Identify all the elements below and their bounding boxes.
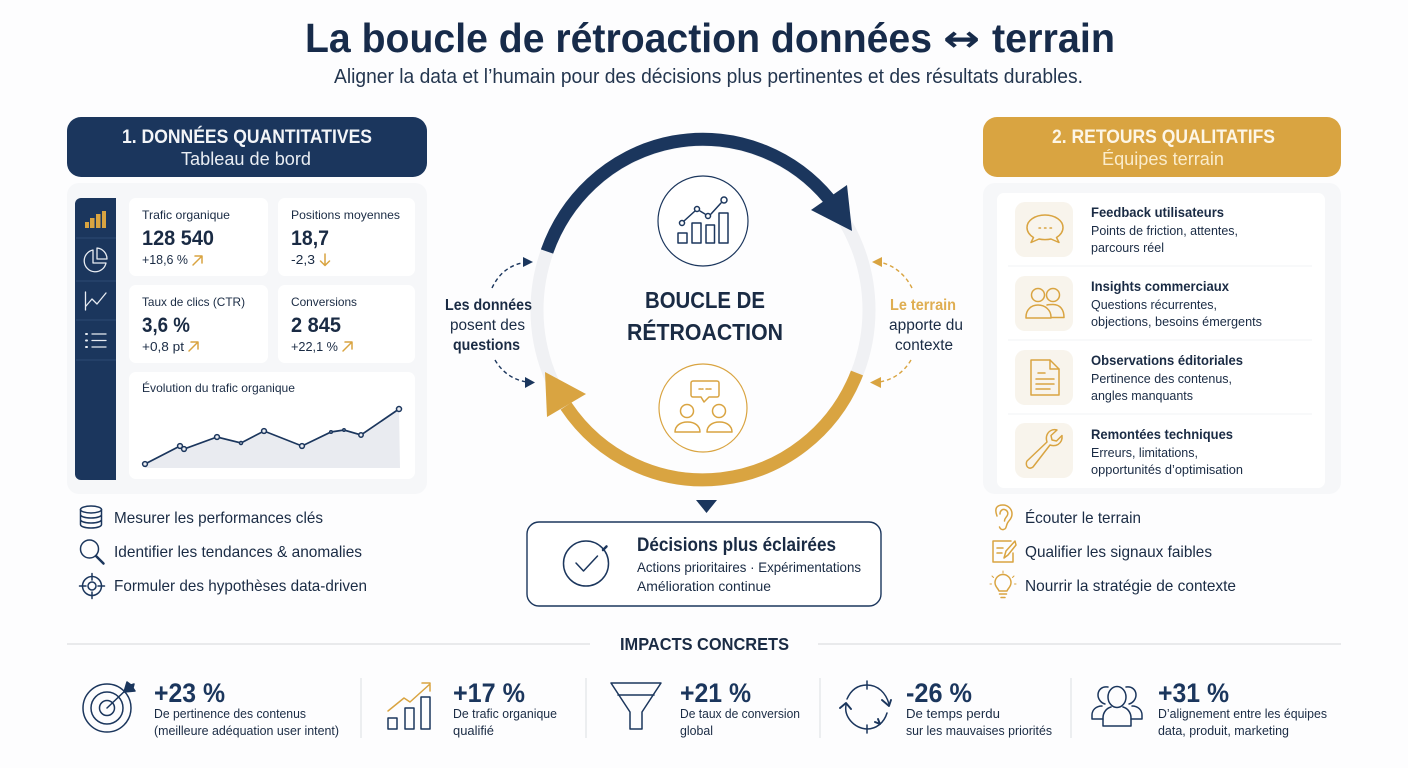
KPI card: conversions: Conversions [291,295,357,309]
text: mesurer: Mesurer les performances clés [114,510,323,527]
side label: le terrain apporte du contexte: apporte du [889,317,963,334]
list: objectifs données [80,506,367,598]
side label: les données posent des questions: questions [453,337,520,354]
side label: le terrain apporte du contexte: contexte [895,337,953,354]
title: La boucle de rétroaction données [305,15,932,61]
item: feedback utilisateurs: parcours réel [1091,241,1164,255]
icon: team [1092,686,1142,726]
navy arrow: données vers terrain [547,139,852,252]
item: remontées techniques: opportunités d’optimisation [1091,463,1243,477]
text: nourrir: Nourrir la stratégie de contexte [1025,578,1236,595]
icon: check circle [564,541,608,586]
side label: les données posent des questions [445,257,535,388]
panel heading: données quantitatives: 1. DONNÉES QUANTITATIVES [122,126,372,148]
icon: magnifier [80,540,104,564]
KPI card: positions moyennes: -2,3 [291,252,315,267]
KPI card: trafic organique: +18,6 % [142,252,188,267]
metric: trafic: +17 % [453,678,525,708]
metric: trafic [388,678,557,738]
metric: trafic: qualifié [453,724,494,738]
item: insights commerciaux: Questions récurrentes, [1091,298,1217,312]
panel: données quantitatives [67,117,427,494]
text: formuler: Formuler des hypothèses data-driven [114,578,367,595]
icon: rising bars [388,683,430,729]
KPI card: taux de clics [129,285,268,363]
side label: le terrain apporte du contexte [870,257,963,388]
callout text [637,535,861,594]
metric: conversion [611,678,800,738]
KPI card: trafic organique [129,198,268,276]
metric: temps perdu [840,678,1052,738]
gold arrow: terrain vers données [545,372,857,480]
text: écouter: Écouter le terrain [1025,508,1141,527]
line chart: évolution du trafic organique [129,372,415,479]
KPI card: taux de clics: 3,6 % [142,313,190,337]
icon: team talking in circle [659,364,747,452]
metric: trafic: De trafic organique [453,707,557,721]
icon: ear [996,505,1012,530]
icon: list [86,334,106,347]
item: insights commerciaux: Insights commerciaux [1091,278,1229,294]
arrow: vers décisions [696,500,717,513]
heading: impacts concrets: IMPACTS CONCRETS [620,634,789,654]
KPI card: trafic organique: Trafic organique [142,208,230,222]
title: terrain [992,15,1115,61]
title: ↔ [943,19,980,60]
item: observations éditoriales [1015,350,1243,405]
metric: temps perdu: -26 % [906,678,972,708]
metric: conversion: global [680,724,713,738]
item: remontées techniques: Erreurs, limitations, [1091,446,1198,460]
callout text: Amélioration continue [637,578,771,594]
icon: edit note [993,541,1016,562]
metric: pertinence: De pertinence des contenus [154,707,306,721]
panel heading: retours qualitatifs [983,117,1341,177]
side label: le terrain apporte du contexte: Le terrain [890,297,956,314]
panel background [983,183,1341,494]
item: observations éditoriales: Observations éditoriales [1091,352,1243,368]
KPI card: conversions: 2 845 [291,313,341,337]
panel heading: données quantitatives [67,117,427,177]
callout text: Décisions plus éclairées [637,535,836,556]
grey ring [537,140,869,480]
center label: RÉTROACTION [627,318,783,345]
metric: temps perdu: sur les mauvaises priorités [906,724,1052,738]
KPI card: trafic organique: 128 540 [142,226,214,250]
item: feedback utilisateurs [1015,202,1238,257]
KPI card: conversions [278,285,415,363]
panel heading: retours qualitatifs: Équipes terrain [1102,148,1224,169]
metric: pertinence: (meilleure adéquation user intent) [154,724,339,738]
metric: temps perdu: De temps perdu [906,707,1000,721]
item: observations éditoriales: angles manquants [1091,389,1193,403]
item: observations éditoriales: Pertinence des contenus, [1091,372,1232,386]
icon: funnel [611,683,661,729]
icon: pie chart [84,248,107,272]
metric: alignement: data, produit, marketing [1158,724,1289,738]
metric: conversion: +21 % [680,678,751,708]
icon: target [83,682,135,732]
icon: crosshair target [80,574,104,598]
center label [627,287,783,345]
panel heading: données quantitatives: Tableau de bord [181,148,311,169]
side label: les données posent des questions: posent des [450,317,525,334]
section: impacts concrets [67,634,1341,738]
panel: retours qualitatifs [983,117,1341,494]
white list card [997,193,1325,488]
panel heading: retours qualitatifs: 2. RETOURS QUALITATIFS [1052,127,1275,148]
dashboard sidebar [75,198,116,480]
item: feedback utilisateurs: Feedback utilisateurs [1091,204,1224,220]
subtitle: Aligner la data et l’humain pour des décisions plus pertinentes et des résultats durables. [334,65,1083,88]
callout text: Actions prioritaires · Expérimentations [637,559,861,575]
diagram: boucle de rétroaction [445,139,963,480]
text: qualifier: Qualifier les signaux faibles [1025,544,1212,561]
side label: les données posent des questions: Les données [445,297,532,314]
KPI card: conversions: +22,1 % [291,339,338,354]
metric: alignement: D’alignement entre les équipes [1158,707,1327,721]
metric: alignement [1092,678,1327,738]
icon: cycle arrows [840,681,891,733]
icon: data chart in circle [658,176,748,266]
item: insights commerciaux: objections, besoins émergents [1091,315,1262,329]
icon: bars [85,211,106,228]
metric: alignement: +31 % [1158,678,1229,708]
KPI card: taux de clics: Taux de clics (CTR) [142,295,245,309]
KPI card: positions moyennes [278,198,415,276]
KPI card: positions moyennes: 18,7 [291,226,329,250]
icon: database [80,506,102,528]
text: identifier: Identifier les tendances & anomalies [114,544,362,561]
center label: BOUCLE DE [645,287,765,313]
metric: pertinence: +23 % [154,678,225,708]
dashboard background [67,183,427,494]
callout: décisions plus éclairées [527,522,881,606]
KPI card: taux de clics: +0,8 pt [142,339,184,354]
item: insights commerciaux [1015,276,1262,331]
line chart: évolution du trafic organique: Évolution du trafic organique [142,380,295,395]
item: feedback utilisateurs: Points de friction, attentes, [1091,224,1238,238]
item: remontées techniques: Remontées techniques [1091,426,1233,442]
item: remontées techniques [1015,423,1243,478]
metric: conversion: De taux de conversion [680,707,800,721]
list: objectifs terrain [990,505,1236,598]
KPI card: positions moyennes: Positions moyennes [291,208,400,222]
icon: light bulb [990,571,1016,598]
metric: pertinence [83,678,339,738]
icon: line chart [86,292,106,310]
